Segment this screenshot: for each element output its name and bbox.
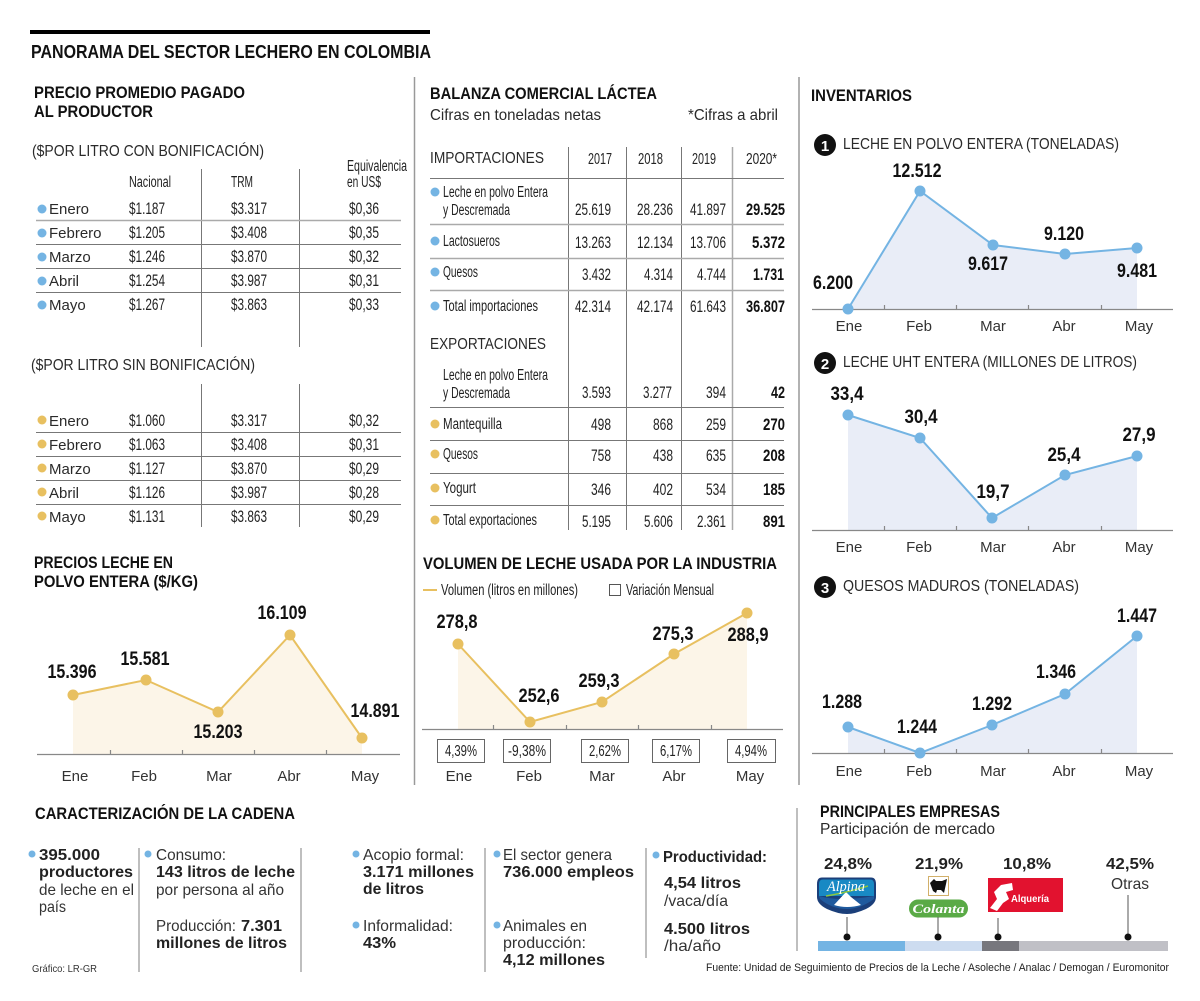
table: precio sin bonificación: $3.408: [231, 435, 267, 454]
stat: empleos y animales: El sector genera: [503, 847, 612, 864]
table: precio sin bonificación: $0,31: [349, 435, 379, 454]
table: importaciones y exportaciones: Lactosueros: [443, 233, 500, 250]
chart 1: leche en polvo entera: 9.481: [1117, 261, 1157, 282]
table: precio sin bonificación: $1.126: [129, 483, 165, 502]
stat: acopio formal e informalidad: Informalidad:: [363, 918, 453, 935]
table: importaciones y exportaciones: 2.361: [697, 512, 726, 531]
stat: consumo y producción: Consumo:: [156, 847, 226, 864]
table: importaciones y exportaciones: EXPORTACIONES: [430, 336, 546, 353]
chart 2: leche UHT entera: LECHE UHT ENTERA (MILLONES DE LITROS): [843, 354, 1137, 371]
line chart: precios: May: [351, 768, 380, 785]
chart 1: leche en polvo entera: May: [1125, 318, 1154, 335]
table: importaciones y exportaciones: 2018: [638, 151, 663, 168]
heading: inventarios: INVENTARIOS: [811, 87, 912, 105]
table: importaciones y exportaciones: 758: [591, 446, 611, 465]
chart 2: leche UHT entera: Ene: [836, 539, 862, 556]
table: importaciones y exportaciones: 5.372: [752, 233, 785, 252]
heading: balanza: BALANZA COMERCIAL LÁCTEA: [430, 84, 657, 103]
table: precio con bonificación: Equivalencia: [347, 158, 407, 175]
table: importaciones y exportaciones: 42.174: [637, 297, 673, 316]
line chart: volumen: Abr: [662, 768, 686, 785]
table: precio con bonificación: Enero: [49, 201, 89, 218]
market share percentages: Otras: [1111, 876, 1149, 893]
table: precio con bonificación: $3.317: [231, 199, 267, 218]
chart 2: leche UHT entera: Feb: [906, 539, 932, 556]
line chart: precios: [37, 603, 400, 785]
heading: precios leche: POLVO ENTERA ($/KG): [34, 573, 198, 591]
table: importaciones y exportaciones: 1.731: [753, 265, 784, 284]
chart 2: leche UHT entera: 19,7: [976, 482, 1010, 503]
market share bar: [818, 895, 1168, 951]
table: precio sin bonificación: $0,28: [349, 483, 379, 502]
stat: productividad: /vaca/día: [664, 893, 728, 910]
table: importaciones y exportaciones: 2017: [588, 151, 612, 168]
legend: [423, 582, 714, 599]
table: importaciones y exportaciones: 534: [706, 480, 726, 499]
line chart: volumen: May: [736, 768, 765, 785]
table: importaciones y exportaciones: Quesos: [443, 446, 478, 463]
table: precio sin bonificación: $0,29: [349, 507, 379, 526]
chart 3: quesos maduros: Ene: [836, 763, 862, 780]
table: precio con bonificación: $3.870: [231, 247, 267, 266]
stat: consumo y producción: Producción:: [156, 918, 236, 935]
line chart: volumen: Ene: [446, 768, 472, 785]
table: importaciones y exportaciones: 2019: [692, 151, 716, 168]
heading: caracterización: CARACTERIZACIÓN DE LA CADENA: [35, 804, 295, 823]
stat: empleos y animales: 736.000 empleos: [503, 864, 634, 881]
table: importaciones y exportaciones: 3.432: [582, 265, 611, 284]
logo: Alquería: [988, 878, 1063, 912]
stat: productores: de leche en el: [39, 882, 134, 899]
table: importaciones y exportaciones: 13.263: [575, 233, 611, 252]
heading: precio promedio: AL PRODUCTOR: [34, 103, 153, 121]
subheading: sin bonificación: ($POR LITRO SIN BONIFICACIÓN): [31, 355, 255, 374]
stat: consumo y producción: 143 litros de leche: [156, 864, 295, 881]
table: importaciones y exportaciones: Total exportaciones: [443, 512, 537, 529]
stat: productores: productores: [39, 864, 133, 881]
table: precio con bonificación: $1.205: [129, 223, 165, 242]
logo: Colanta: Colanta: [912, 901, 965, 916]
chart 3: quesos maduros: [812, 576, 1173, 780]
chart 3: quesos maduros: Abr: [1052, 763, 1076, 780]
table: importaciones y exportaciones: 5.606: [644, 512, 673, 531]
line chart: precios: 15.396: [48, 662, 96, 683]
line chart: precios: 15.203: [194, 722, 242, 743]
panel: balanza comercial láctea: [430, 84, 785, 531]
stat: consumo y producción: [156, 847, 295, 952]
subheading: participación de mercado: Participación de mercado: [820, 821, 995, 838]
heading: precio promedio: [34, 84, 245, 121]
chart 1: leche en polvo entera: Abr: [1052, 318, 1076, 335]
line chart: volumen: 259,3: [578, 671, 620, 692]
table: importaciones y exportaciones: 402: [653, 480, 673, 499]
line chart: volumen: 278,8: [436, 612, 478, 633]
table: importaciones y exportaciones: 868: [653, 415, 673, 434]
stat: productores: país: [39, 899, 66, 916]
line chart: volumen: [422, 608, 783, 785]
line chart: precios: 14.891: [350, 701, 400, 722]
logo: Colanta: [909, 876, 968, 918]
stat: empleos y animales: Animales en: [503, 918, 587, 935]
table: importaciones y exportaciones: 3.593: [582, 383, 611, 402]
table: importaciones y exportaciones: 12.134: [637, 233, 673, 252]
table: importaciones y exportaciones: 3.277: [643, 383, 672, 402]
table: precio sin bonificación: $3.863: [231, 507, 267, 526]
line chart: volumen: 6,17%: [660, 743, 692, 760]
stat: productividad: Productividad:: [663, 849, 767, 866]
logo: Alquería: Alquería: [1011, 893, 1049, 905]
table: importaciones y exportaciones: 498: [591, 415, 611, 434]
chart 3: quesos maduros: 1.288: [822, 692, 862, 713]
table: precio con bonificación: Marzo: [49, 249, 91, 266]
table: precio con bonificación: $0,32: [349, 247, 379, 266]
line chart: volumen: 288,9: [728, 625, 768, 646]
table: precio con bonificación: $1.187: [129, 199, 165, 218]
stat: empleos y animales: [503, 847, 634, 969]
table: importaciones y exportaciones: 208: [763, 446, 785, 465]
chart 3: quesos maduros: Feb: [906, 763, 932, 780]
credit: gráfico: Gráfico: LR-GR: [32, 963, 97, 975]
table: importaciones y exportaciones: 25.619: [575, 200, 611, 219]
panel: volumen de leche usada por la industria: [422, 555, 783, 785]
table: importaciones y exportaciones: [430, 147, 785, 531]
table: importaciones y exportaciones: 5.195: [582, 512, 611, 531]
stat: acopio formal e informalidad: 3.171 millones: [363, 864, 474, 881]
table: importaciones y exportaciones: y Descremada: [443, 202, 510, 219]
heading: precio promedio: PRECIO PROMEDIO PAGADO: [34, 84, 245, 102]
chart 1: leche en polvo entera: 1: [821, 138, 829, 155]
table: precio con bonificación: $3.987: [231, 271, 267, 290]
table: importaciones y exportaciones: 36.807: [746, 297, 785, 316]
table: importaciones y exportaciones: Mantequilla: [443, 416, 502, 433]
legend: Variación Mensual: [626, 582, 714, 599]
chart 2: leche UHT entera: [812, 352, 1173, 556]
table: precio con bonificación: $1.246: [129, 247, 165, 266]
chart 2: leche UHT entera: 27,9: [1122, 425, 1156, 446]
line chart: precios: Mar: [206, 768, 232, 785]
table: precio sin bonificación: $1.060: [129, 411, 165, 430]
table: precio sin bonificación: $1.063: [129, 435, 165, 454]
table: importaciones y exportaciones: IMPORTACIONES: [430, 150, 544, 167]
chart 3: quesos maduros: QUESOS MADUROS (TONELADAS): [843, 578, 1079, 595]
market share percentages: [824, 856, 1154, 893]
table: precio sin bonificación: Mayo: [49, 509, 86, 526]
table: precio sin bonificación: $3.987: [231, 483, 267, 502]
chart 1: leche en polvo entera: LECHE EN POLVO ENTERA (TONELADAS): [843, 136, 1119, 153]
chart 2: leche UHT entera: Mar: [980, 539, 1006, 556]
chart 3: quesos maduros: May: [1125, 763, 1154, 780]
table: precio sin bonificación: $0,29: [349, 459, 379, 478]
chart 1: leche en polvo entera: 12.512: [892, 161, 942, 182]
table: importaciones y exportaciones: 28.236: [637, 200, 673, 219]
table: importaciones y exportaciones: 41.897: [690, 200, 726, 219]
note: cifras a abril: *Cifras a abril: [688, 107, 778, 124]
table: precio sin bonificación: Abril: [49, 485, 79, 502]
table: precio con bonificación: $1.254: [129, 271, 165, 290]
heading: precios leche: PRECIOS LECHE EN: [34, 554, 173, 572]
table: precio con bonificación: Nacional: [129, 174, 171, 191]
stat: consumo y producción: millones de litros: [156, 935, 287, 952]
table: importaciones y exportaciones: 346: [591, 480, 611, 499]
stat: empleos y animales: 4,12 millones: [503, 952, 605, 969]
panel: principales empresas: [797, 803, 1168, 951]
line chart: precios: 16.109: [258, 603, 306, 624]
stat: acopio formal e informalidad: [363, 847, 474, 952]
chart 2: leche UHT entera: May: [1125, 539, 1154, 556]
table: importaciones y exportaciones: 4.314: [644, 265, 673, 284]
heading: volumen: VOLUMEN DE LECHE USADA POR LA INDUSTRIA: [423, 555, 777, 573]
chart 2: leche UHT entera: 33,4: [830, 384, 864, 405]
chart 3: quesos maduros: 3: [821, 580, 829, 597]
stat: productividad: /ha/año: [664, 938, 721, 955]
table: importaciones y exportaciones: 2020*: [746, 151, 777, 168]
table: importaciones y exportaciones: 185: [763, 480, 785, 499]
chart 3: quesos maduros: 1.244: [897, 717, 937, 738]
title: PANORAMA DEL SECTOR LECHERO EN COLOMBIA: [31, 42, 431, 62]
chart 2: leche UHT entera: 30,4: [904, 407, 938, 428]
line chart: volumen: 2,62%: [589, 743, 621, 760]
chart 3: quesos maduros: 1.346: [1036, 662, 1076, 683]
chart 2: leche UHT entera: 2: [821, 356, 829, 373]
table: precio con bonificación: $0,36: [349, 199, 379, 218]
table: precio con bonificación: [36, 158, 407, 347]
table: importaciones y exportaciones: y Descremada: [443, 385, 510, 402]
heading: principales empresas: PRINCIPALES EMPRESAS: [820, 803, 1000, 821]
stat: consumo y producción: por persona al año: [156, 882, 284, 899]
table: precio sin bonificación: Febrero: [49, 437, 102, 454]
table: importaciones y exportaciones: Leche en polvo Entera: [443, 184, 548, 201]
panel: caracterización de la cadena: [28, 804, 767, 975]
chart 3: quesos maduros: 1.447: [1117, 606, 1157, 627]
chart 1: leche en polvo entera: 9.120: [1044, 224, 1084, 245]
panel: precios leche en polvo entera: [34, 554, 400, 785]
logo: Alpina: Alpina: [826, 879, 865, 895]
table: precio sin bonificación: [36, 384, 401, 527]
table: precio con bonificación: $0,35: [349, 223, 379, 242]
table: precio sin bonificación: $1.127: [129, 459, 165, 478]
table: precio con bonificación: Mayo: [49, 297, 86, 314]
line chart: precios: Abr: [277, 768, 301, 785]
table: importaciones y exportaciones: Quesos: [443, 264, 478, 281]
panel: precio promedio pagado al productor: [31, 84, 407, 527]
line chart: precios: Feb: [131, 768, 157, 785]
table: importaciones y exportaciones: 394: [706, 383, 726, 402]
line chart: precios: 15.581: [120, 649, 170, 670]
market share percentages: 21,9%: [915, 856, 963, 873]
chart 3: quesos maduros: Mar: [980, 763, 1006, 780]
stat: productividad: 4.500 litros: [664, 921, 750, 938]
line chart: volumen: Feb: [516, 768, 542, 785]
table: importaciones y exportaciones: 270: [763, 415, 785, 434]
table: precio con bonificación: Febrero: [49, 225, 102, 242]
title: [30, 30, 431, 62]
line chart: precios: Ene: [62, 768, 88, 785]
table: importaciones y exportaciones: 42: [771, 383, 785, 402]
table: precio con bonificación: $0,33: [349, 295, 379, 314]
chart 1: leche en polvo entera: Feb: [906, 318, 932, 335]
stat: consumo y producción: 7.301: [241, 918, 282, 935]
table: importaciones y exportaciones: 29.525: [746, 200, 785, 219]
chart 1: leche en polvo entera: 6.200: [813, 273, 853, 294]
table: precio sin bonificación: Enero: [49, 413, 89, 430]
stat: acopio formal e informalidad: de litros: [363, 881, 424, 898]
stat: productores: 395.000: [39, 847, 100, 864]
table: precio sin bonificación: $0,32: [349, 411, 379, 430]
table: importaciones y exportaciones: 13.706: [690, 233, 726, 252]
table: importaciones y exportaciones: Leche en polvo Entera: [443, 367, 548, 384]
panel: inventarios: [811, 87, 1173, 780]
chart 2: leche UHT entera: 25,4: [1048, 445, 1081, 466]
chart 1: leche en polvo entera: Mar: [980, 318, 1006, 335]
table: precio con bonificación: $3.863: [231, 295, 267, 314]
table: importaciones y exportaciones: 61.643: [690, 297, 726, 316]
chart 1: leche en polvo entera: Ene: [836, 318, 862, 335]
market share percentages: 42,5%: [1106, 856, 1154, 873]
legend: Volumen (litros en millones): [441, 582, 578, 599]
line chart: volumen: Mar: [589, 768, 615, 785]
market share percentages: 10,8%: [1003, 856, 1051, 873]
subheading: cifras en toneladas: Cifras en toneladas netas: [430, 107, 601, 124]
table: importaciones y exportaciones: 42.314: [575, 297, 611, 316]
market share percentages: 24,8%: [824, 856, 872, 873]
table: precio sin bonificación: $3.317: [231, 411, 267, 430]
logo: Alpina: [817, 878, 876, 914]
stat: productividad: [663, 849, 767, 955]
table: importaciones y exportaciones: Yogurt: [443, 480, 477, 497]
chart 3: quesos maduros: 1.292: [972, 694, 1012, 715]
line chart: volumen: -9,38%: [508, 743, 546, 760]
table: importaciones y exportaciones: 635: [706, 446, 726, 465]
stat: productividad: 4,54 litros: [664, 875, 741, 892]
table: precio con bonificación: $1.267: [129, 295, 165, 314]
table: precio con bonificación: $3.408: [231, 223, 267, 242]
source: Fuente: Unidad de Seguimiento de Precios de la Leche / Asoleche / Analac / Demogan / Euromonitor: [706, 962, 1169, 974]
table: precio con bonificación: Abril: [49, 273, 79, 290]
chart 2: leche UHT entera: Abr: [1052, 539, 1076, 556]
chart 1: leche en polvo entera: [812, 134, 1173, 335]
table: importaciones y exportaciones: 438: [653, 446, 673, 465]
line chart: volumen: 4,94%: [735, 743, 767, 760]
table: importaciones y exportaciones: 4.744: [697, 265, 726, 284]
table: importaciones y exportaciones: Total importaciones: [443, 298, 538, 315]
stat: empleos y animales: producción:: [503, 935, 586, 952]
table: precio con bonificación: $0,31: [349, 271, 379, 290]
line chart: volumen: 275,3: [652, 624, 694, 645]
subheading: con bonificación: ($POR LITRO CON BONIFICACIÓN): [32, 141, 264, 160]
line chart: volumen: 252,6: [518, 686, 560, 707]
table: precio sin bonificación: Marzo: [49, 461, 91, 478]
stat: productores: [39, 847, 134, 916]
stat: acopio formal e informalidad: Acopio formal:: [363, 847, 464, 864]
table: precio con bonificación: en US$: [347, 174, 381, 191]
chart 1: leche en polvo entera: 9.617: [968, 254, 1008, 275]
line chart: volumen: 4,39%: [445, 743, 477, 760]
table: precio sin bonificación: $1.131: [129, 507, 165, 526]
stat: acopio formal e informalidad: 43%: [363, 935, 396, 952]
table: precio con bonificación: TRM: [231, 174, 253, 191]
table: importaciones y exportaciones: 891: [763, 512, 785, 531]
table: precio sin bonificación: $3.870: [231, 459, 267, 478]
heading: precios leche: [34, 554, 198, 591]
table: importaciones y exportaciones: 259: [706, 415, 726, 434]
